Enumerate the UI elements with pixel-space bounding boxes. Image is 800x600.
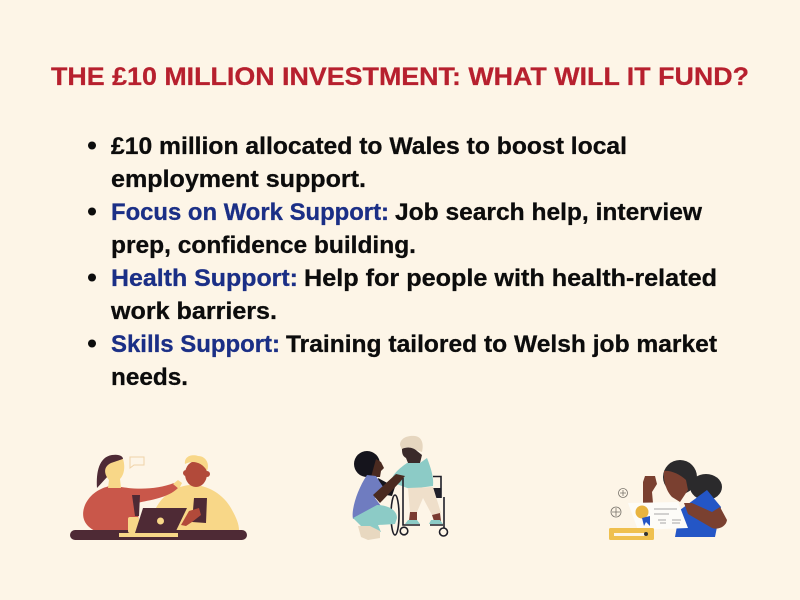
illustration: carer and wheelchair user — [353, 436, 448, 540]
man body — [155, 485, 239, 530]
bullet: funding allocation — [88, 133, 627, 193]
plus icons — [611, 488, 628, 517]
carer arm — [373, 474, 405, 503]
carer shoes — [358, 526, 380, 540]
table — [70, 530, 247, 540]
man's hand — [181, 508, 201, 526]
woman face — [105, 459, 124, 488]
illustration: two people at a laptop — [70, 455, 247, 540]
patient legs — [408, 487, 441, 515]
woman body — [83, 483, 178, 533]
carer top — [353, 475, 385, 519]
patient feet — [405, 520, 443, 524]
face — [664, 471, 688, 502]
bullet: health support — [88, 265, 717, 325]
patient lower legs — [409, 512, 441, 521]
wheelchair seat — [432, 488, 441, 498]
patient top — [391, 458, 433, 489]
arm — [684, 503, 727, 529]
bullet: skills support — [88, 331, 717, 391]
speech bubble — [130, 457, 144, 468]
man head — [183, 455, 210, 487]
raised fist — [643, 476, 657, 503]
laptop — [135, 508, 187, 533]
carer face — [371, 459, 384, 477]
carer hair — [354, 451, 380, 477]
bullet: skills support: Training tailored to Welsh job market — [286, 331, 717, 358]
carer dark sleeve — [378, 478, 395, 496]
bullet: work support — [88, 199, 703, 259]
bullet: funding allocation: £10 million allocated to Wales to boost local — [111, 133, 627, 160]
yellow badge — [609, 528, 654, 540]
woman hair — [97, 455, 123, 488]
hand and mat — [128, 517, 139, 533]
bullet: health support: work barriers. — [110, 298, 277, 325]
title: THE £10 MILLION INVESTMENT: WHAT WILL IT FUND? — [51, 63, 749, 91]
patient hair — [400, 436, 423, 452]
bullet: work support: Focus on Work Support: — [111, 199, 389, 226]
carer trousers — [353, 505, 397, 532]
hair back — [690, 474, 722, 500]
bullet: funding allocation: employment support. — [111, 166, 366, 193]
illustration: woman with certificate — [609, 460, 727, 540]
certificate — [628, 502, 688, 530]
shirt — [675, 490, 721, 537]
bullet list — [88, 133, 717, 391]
bullet: work support: Job search help, interview — [395, 199, 703, 226]
bullet: health support: Health Support: — [111, 265, 298, 292]
bullet: skills support: Skills Support: — [111, 331, 280, 358]
man phone — [192, 498, 207, 523]
woman arm shade — [132, 495, 140, 516]
patient face and neck — [402, 448, 422, 463]
wheelchair — [391, 476, 448, 536]
hand on shoulder — [173, 480, 182, 489]
bullet: work support: prep, confidence building. — [111, 232, 416, 259]
bullet: skills support: needs. — [111, 364, 188, 391]
bullet: health support: Help for people with health-related — [304, 265, 717, 292]
